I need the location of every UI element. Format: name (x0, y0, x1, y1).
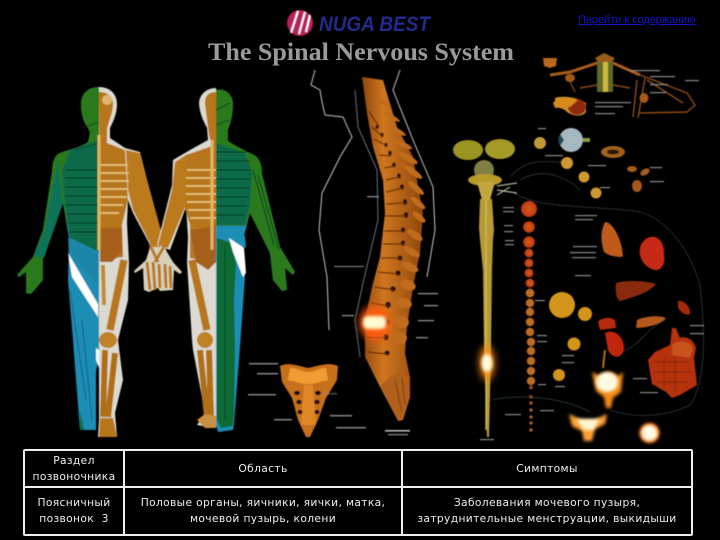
header cell: section (32, 454, 116, 482)
cell: symptoms text: Заболевания мочевого пузыря, (454, 496, 640, 509)
cell: symptoms text (417, 496, 677, 525)
nerve fibres (492, 161, 703, 415)
spleen (678, 301, 690, 315)
sacrum and spine tiny callouts (248, 196, 438, 435)
cell: symptoms text: затруднительные менструации, выкидыши (417, 512, 677, 525)
adrenal and kidney (598, 318, 624, 368)
ganglion chain (521, 201, 537, 432)
hot spot: cord glow (480, 346, 494, 380)
header cell: section: позвоночника (32, 470, 116, 482)
hot spot: bladder (592, 372, 623, 408)
cell: vertebra: Поясничный (38, 496, 110, 509)
spine processes (376, 97, 427, 344)
liver (616, 281, 656, 301)
cell: affected area (141, 496, 385, 525)
logo: emblem (287, 10, 313, 36)
header cell: symptoms: Симптомы (516, 462, 578, 474)
top-right nerve root diagram (543, 53, 695, 118)
cell: vertebra (38, 496, 110, 525)
navigation link: Перейти к содержанию (578, 14, 695, 26)
abdominal ganglia (549, 292, 592, 381)
stomach and intestines (648, 328, 697, 398)
header cell: section: Раздел (53, 454, 95, 466)
hot spot: bowel (640, 423, 660, 443)
hot spot: spine glow (360, 306, 390, 340)
pancreas (636, 316, 666, 328)
cell: affected area: мочевой пузырь, колени (190, 512, 336, 525)
lungs (601, 222, 623, 257)
clasped hands (134, 245, 182, 292)
cell: vertebra: позвонок 3 (39, 512, 109, 525)
side body outline (311, 70, 435, 357)
spinal cord and brainstem (453, 139, 517, 437)
back figure: dermatome half (216, 90, 295, 432)
header cell: area: Область (238, 462, 288, 474)
table: spine section details (23, 449, 693, 536)
front figure: skeleton half (98, 87, 167, 437)
hot spot: uterus (569, 414, 607, 441)
front figure: dermatome half (17, 87, 99, 430)
spine disc lines (366, 111, 406, 354)
back figure: skeleton half (157, 88, 217, 428)
title: The Spinal Nervous System (208, 39, 514, 66)
head ganglia and eye (534, 128, 651, 198)
spine foramina (376, 125, 408, 355)
cell: affected area: Половые органы, яичники, яички, матка, (141, 496, 385, 509)
nerve cross-section (553, 97, 586, 116)
organ tiny callouts (480, 70, 704, 440)
logo: wordmark: NUGA BEST (319, 13, 432, 36)
spine column (362, 77, 427, 421)
heart (640, 237, 664, 270)
sacrum (280, 364, 338, 437)
